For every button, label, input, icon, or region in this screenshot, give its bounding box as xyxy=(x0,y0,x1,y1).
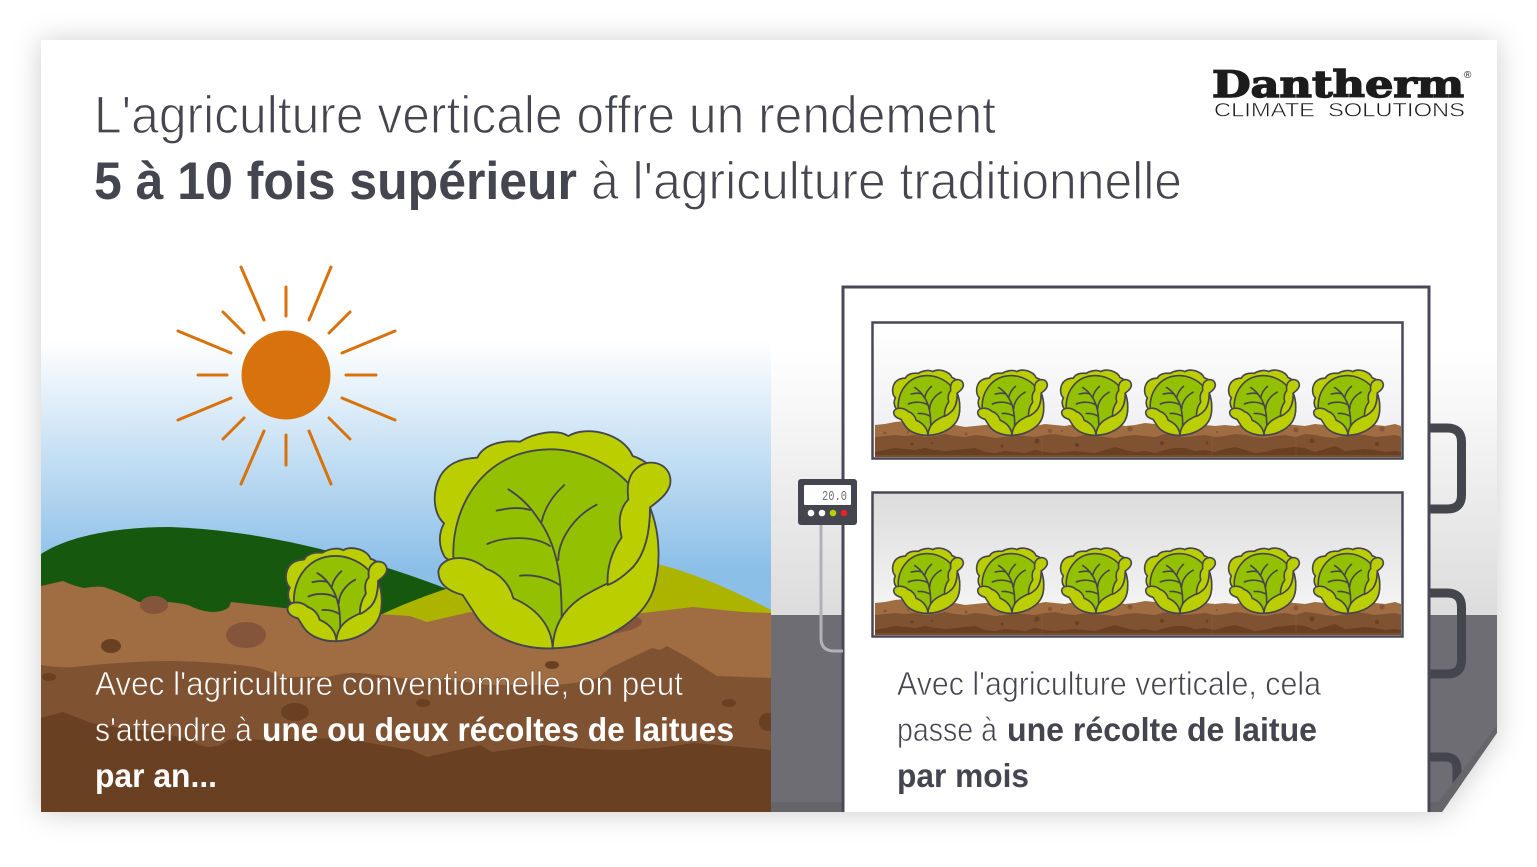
floor xyxy=(771,615,1497,812)
text block: vertical: Avec l'agriculture verticale, cela xyxy=(897,665,1322,702)
olive hill xyxy=(382,564,771,622)
panel: conventional farming scene xyxy=(41,357,771,812)
dark green hill xyxy=(41,527,446,614)
text block: vertical: par mois xyxy=(897,757,1029,794)
rack frame xyxy=(843,287,1429,847)
shadow under big lettuce xyxy=(614,616,642,634)
icon: thermometer display xyxy=(798,479,857,525)
icon: sun xyxy=(178,267,395,484)
text block: vertical: passe à xyxy=(897,711,998,748)
wall xyxy=(771,411,1497,615)
title: L'agriculture verticale offre un rendement xyxy=(94,86,996,145)
shelf: top xyxy=(872,322,1402,458)
text block: vertical: une récolte de laitue xyxy=(1007,711,1317,748)
icon: pipe handles xyxy=(1425,428,1462,800)
icon: thermometer display: 20.0 xyxy=(822,489,847,505)
sensor wire xyxy=(821,525,843,651)
logo: Dantherm: SOLUTIONS xyxy=(1328,100,1465,122)
title: à l'agriculture traditionnelle xyxy=(591,152,1182,211)
text block: conventional: Avec l'agriculture conventionnelle, on peut xyxy=(95,665,683,702)
logo: Dantherm: ® xyxy=(1464,70,1472,81)
logo: Dantherm: Dantherm xyxy=(1212,64,1464,106)
text block: vertical xyxy=(897,665,1322,794)
icon: large lettuce xyxy=(435,431,671,648)
panel: vertical farming room xyxy=(771,286,1497,812)
title: 5 à 10 fois supérieur xyxy=(94,152,577,211)
sky xyxy=(41,357,771,570)
text block: conventional: s'attendre à xyxy=(95,711,253,748)
soil xyxy=(41,581,771,685)
text block: conventional: une ou deux récoltes de laitues xyxy=(262,711,734,748)
logo: Dantherm xyxy=(1213,68,1472,116)
title xyxy=(94,86,1182,211)
pebbles xyxy=(42,596,777,731)
fold shade xyxy=(1439,726,1497,810)
text block: conventional xyxy=(95,665,734,794)
icon: small lettuce xyxy=(286,548,387,641)
text block: conventional: par an... xyxy=(95,757,217,794)
shelf: bottom xyxy=(872,492,1402,636)
soil dark layer xyxy=(41,712,771,812)
soil middle layer xyxy=(41,646,771,757)
logo: Dantherm: CLIMATE xyxy=(1214,100,1315,122)
